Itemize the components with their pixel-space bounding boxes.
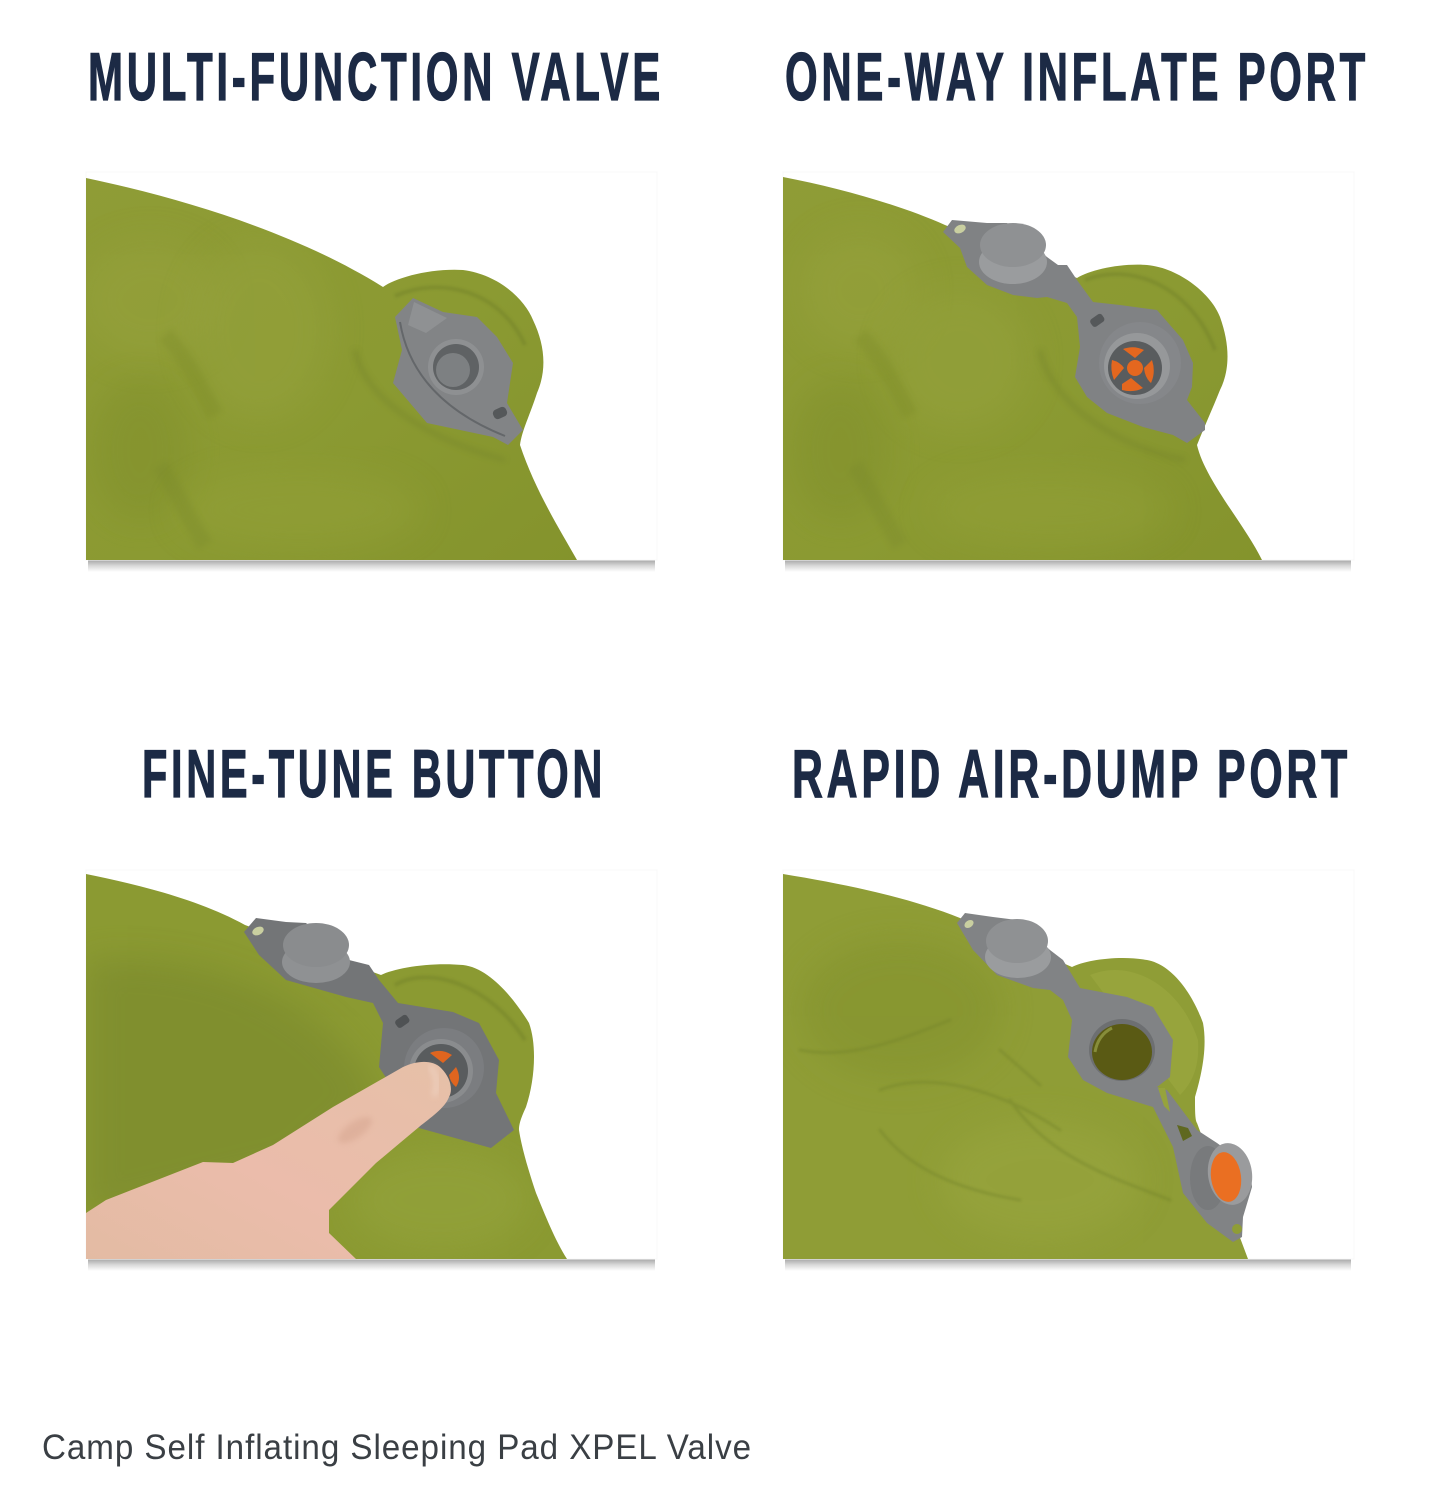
threaded orange port cap [1190, 1146, 1226, 1210]
heading: multi-function valve: MULTI-FUNCTION VALVE [88, 39, 664, 115]
caption: Camp Self Inflating Sleeping Pad XPEL Valve [42, 1428, 752, 1467]
green sleeping pad [783, 870, 1263, 1262]
green sleeping pad [783, 172, 1273, 562]
green sleeping pad [86, 870, 576, 1262]
green sleeping pad [80, 172, 586, 562]
panel: rapid air-dump port photo [783, 870, 1354, 1271]
valve with cap [244, 918, 514, 1148]
panel: multi-function valve photo [80, 172, 657, 572]
open air-dump hole [1089, 1019, 1155, 1081]
valve closed [393, 298, 523, 445]
valve body with open port [957, 913, 1256, 1242]
heading: fine-tune button: FINE-TUNE BUTTON [142, 736, 606, 812]
strap cut-outs [1158, 1088, 1170, 1112]
panel: fine-tune button photo [86, 870, 657, 1271]
panel: one-way inflate port photo [783, 172, 1354, 572]
valve with open cap and strap [943, 220, 1205, 443]
orange valve petals [1111, 347, 1154, 391]
finger [86, 1062, 451, 1259]
